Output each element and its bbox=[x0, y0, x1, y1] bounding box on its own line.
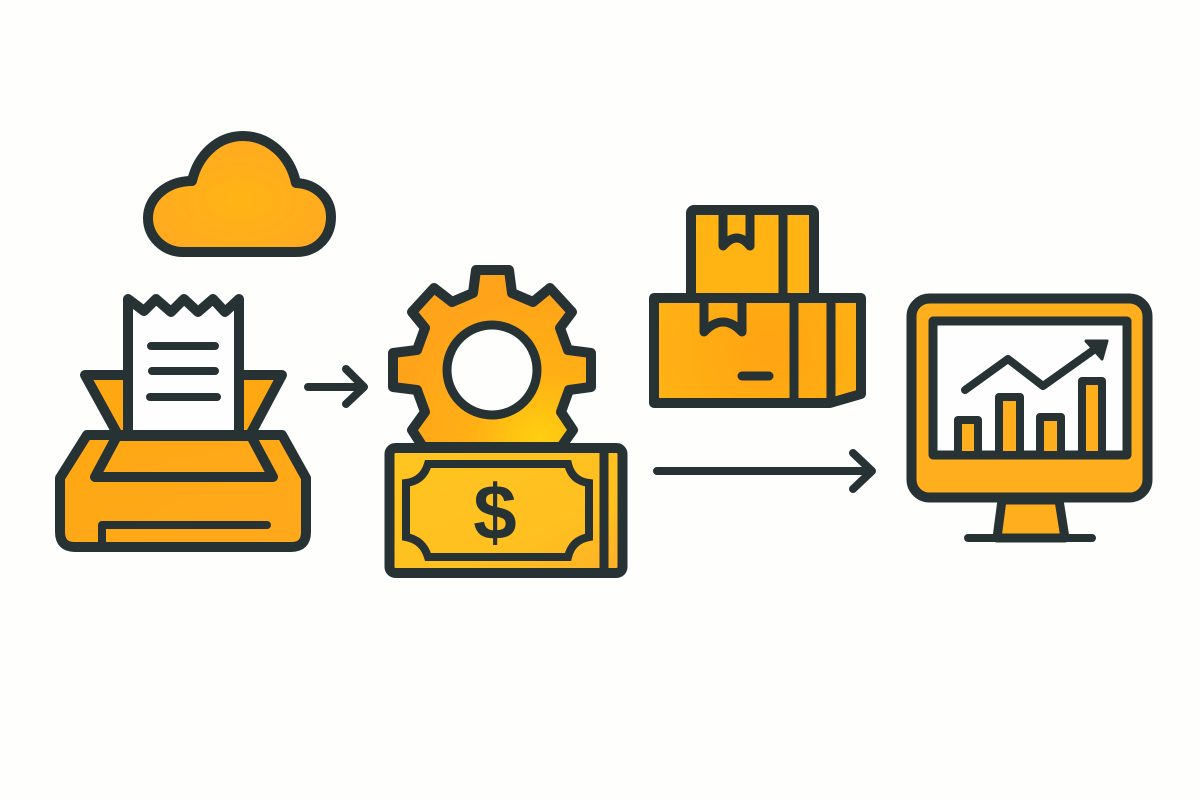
bottom box label bbox=[742, 372, 769, 380]
tray opening bbox=[95, 436, 273, 477]
top box tape bbox=[723, 212, 750, 246]
gear hole bbox=[447, 325, 537, 415]
tray body bbox=[60, 435, 306, 547]
icon: receipt printer tray bbox=[60, 299, 306, 547]
icon: dollar banknote bbox=[390, 448, 622, 573]
left flap bbox=[85, 375, 128, 435]
note edge divider bbox=[600, 448, 608, 573]
icon: cloud bbox=[148, 136, 331, 252]
bottom box tape bbox=[704, 300, 742, 332]
note inner border bbox=[406, 464, 589, 557]
receipt paper bbox=[128, 299, 239, 435]
monitor screen bbox=[933, 321, 1127, 455]
icon: gear bbox=[393, 270, 591, 447]
trend arrow bbox=[965, 341, 1107, 390]
bottom box bbox=[654, 298, 861, 403]
bottom box dividers bbox=[794, 300, 831, 403]
top box bbox=[691, 210, 814, 300]
note body bbox=[390, 448, 622, 573]
icon: stacked boxes bbox=[654, 210, 861, 403]
top box divider bbox=[778, 210, 788, 298]
icon: monitor with chart bbox=[912, 298, 1148, 538]
monitor base bbox=[968, 534, 1092, 542]
dollar sign: $ bbox=[473, 468, 517, 556]
receipt text lines bbox=[150, 346, 217, 397]
arrow: boxes to monitor bbox=[657, 453, 872, 489]
bar chart bbox=[958, 381, 1102, 455]
monitor stand bbox=[997, 500, 1065, 538]
arrow: printer to gear bbox=[308, 369, 364, 404]
tray slot bbox=[102, 525, 267, 547]
monitor body bbox=[912, 298, 1148, 498]
right flap bbox=[238, 375, 282, 435]
